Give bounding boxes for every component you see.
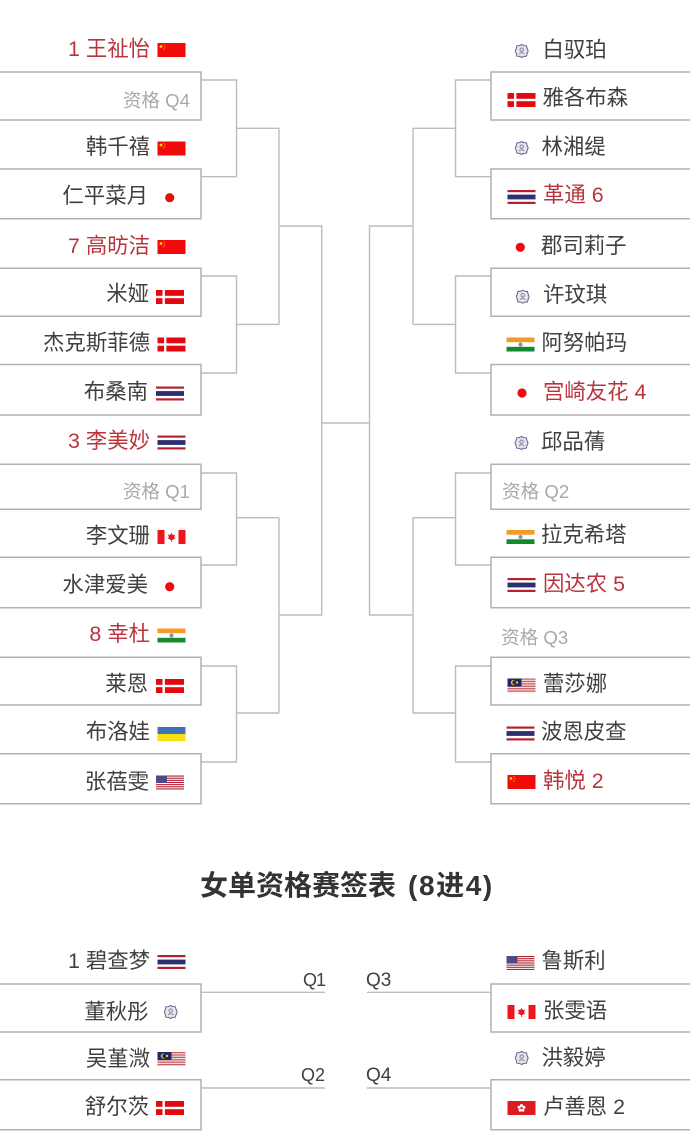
player: 高昉洁: 7 高昉洁: [68, 234, 150, 258]
connector lines: right bracket: [370, 80, 491, 762]
player: 王祉怡: 1 王祉怡: [68, 37, 150, 61]
player: 邱品蒨: 邱品蒨: [541, 430, 605, 454]
player: 蕾莎娜: [508, 672, 607, 696]
player: 蕾莎娜: 蕾莎娜: [543, 672, 607, 696]
player: 阿努帕玛: 阿努帕玛: [542, 331, 627, 355]
player: 幸杜: [89, 622, 186, 646]
label: Q1: Q1: [303, 970, 326, 990]
player: 莱恩: [105, 672, 184, 696]
player: 吴堇溦: [86, 1047, 186, 1071]
player: 拉克希塔: 拉克希塔: [541, 523, 627, 547]
player: 卢善恩: [508, 1095, 625, 1119]
panel: main draw right half: [370, 38, 690, 804]
player: 舒尔茨: 舒尔茨: [85, 1095, 149, 1119]
player: 波恩皮查: 波恩皮查: [541, 720, 627, 744]
player: 洪毅婷: 洪毅婷: [542, 1046, 606, 1070]
qualifier label: Q2: 资格 Q2: [502, 481, 569, 502]
player: 卢善恩: 卢善恩 2: [543, 1095, 625, 1119]
heading: qualifying draw title: 女单资格赛签表 (8进4): [200, 869, 494, 901]
player: 董秋彤: 董秋彤: [84, 1000, 148, 1024]
player: 张雯语: [508, 999, 607, 1023]
player: 因达农: [508, 572, 625, 596]
player: 张蓓雯: 张蓓雯: [85, 770, 149, 794]
player: 鲁斯利: [506, 949, 606, 973]
qualifier lines and boxes: left: [0, 984, 325, 1130]
player: 舒尔茨: [85, 1095, 184, 1119]
player: 布桑南: 布桑南: [84, 380, 148, 404]
player: 高昉洁: [68, 234, 186, 258]
player: 布桑南: [84, 380, 184, 404]
player: 李美妙: [68, 429, 186, 453]
player: 韩千禧: [86, 135, 186, 159]
player: 碧查梦: [68, 949, 186, 973]
player: 林湘缇: 林湘缇: [542, 135, 606, 159]
player: 布洛娃: [86, 720, 186, 744]
player: 韩千禧: 韩千禧: [86, 135, 150, 159]
player: 韩悦: 韩悦 2: [543, 769, 604, 793]
player: 因达农: 因达农 5: [543, 572, 625, 596]
player: 米娅: [106, 282, 184, 306]
label: Q2: Q2: [301, 1065, 325, 1085]
player: 董秋彤: [84, 1000, 177, 1024]
player: 吴堇溦: 吴堇溦: [86, 1047, 150, 1071]
player: 革通: [508, 183, 604, 207]
connector lines: left bracket: [201, 80, 322, 762]
player: 雅各布森: 雅各布森: [542, 86, 628, 110]
player: 郡司莉子: 郡司莉子: [541, 234, 627, 258]
label: Q3: Q3: [366, 970, 391, 991]
player: 王祉怡: [68, 37, 186, 61]
panel: qualifying draw left: [0, 949, 326, 1130]
player: 韩悦: [508, 769, 604, 793]
label: Q4: Q4: [366, 1065, 392, 1086]
panel: qualifying draw right: [366, 949, 690, 1130]
qualifier label: Q4: 资格 Q4: [123, 90, 190, 111]
panel: main draw left half: [0, 37, 322, 804]
player: 莱恩: 莱恩: [105, 672, 148, 696]
player: 碧查梦: 1 碧查梦: [68, 949, 150, 973]
player: 杰克斯菲德: 杰克斯菲德: [43, 331, 150, 355]
player boxes: left: [0, 72, 201, 804]
player: 鲁斯利: 鲁斯利: [542, 949, 606, 973]
player: 白驭珀: 白驭珀: [542, 38, 607, 62]
qualifier label: Q3: 资格 Q3: [501, 627, 568, 648]
player: 许玟琪: 许玟琪: [543, 283, 607, 307]
player: 布洛娃: 布洛娃: [86, 720, 150, 744]
player: 李美妙: 3 李美妙: [68, 429, 150, 453]
player: 宫崎友花: 宫崎友花 4: [543, 380, 647, 404]
qualifier lines and boxes: right: [367, 984, 690, 1130]
player: 张雯语: 张雯语: [543, 999, 607, 1023]
player: 李文珊: 李文珊: [86, 524, 150, 548]
player: 幸杜: 8 幸杜: [89, 622, 150, 646]
final connector: [322, 422, 370, 424]
player: 仁平菜月: 仁平菜月: [62, 184, 148, 208]
player: 水津爱美: 水津爱美: [62, 573, 148, 597]
qualifier label: Q1: 资格 Q1: [123, 481, 190, 502]
player: 革通: 革通 6: [543, 183, 604, 207]
player: 李文珊: [86, 524, 186, 548]
player: 米娅: 米娅: [106, 282, 149, 306]
player: 张蓓雯: [85, 770, 184, 794]
player boxes: right: [491, 72, 690, 804]
